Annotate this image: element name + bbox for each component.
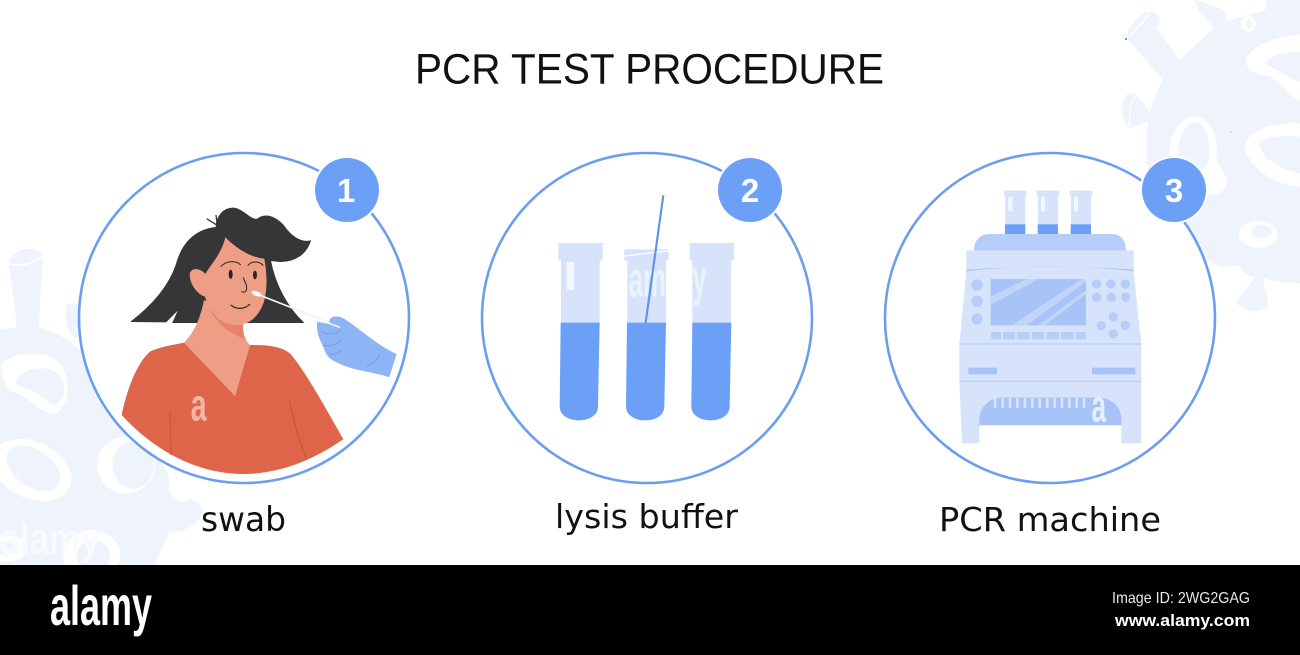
footer image id: Image ID: 2WG2GAG: [1112, 590, 1250, 607]
watermark letter: a: [191, 380, 207, 431]
circle outline 3: [885, 153, 1215, 483]
illustration: woman being swabbed: [122, 208, 397, 474]
number badge 1: [313, 156, 381, 224]
neck shadow: [209, 309, 245, 339]
tube left: [558, 243, 603, 420]
panel: step 3 PCR machine: [885, 153, 1215, 539]
title: PCR TEST PROCEDURE: [415, 46, 884, 94]
footer logo: alamy: [50, 574, 152, 637]
machine lid: [974, 234, 1126, 251]
face: [190, 237, 267, 325]
tube right: [690, 243, 734, 420]
panel: step 2 lysis buffer: [482, 153, 812, 536]
glove: [317, 317, 397, 377]
faint watermark on virus: alamy: [0, 515, 100, 563]
number badge 3: [1140, 156, 1208, 224]
hair: [131, 208, 311, 323]
body seams and vents: [959, 344, 1141, 381]
number badge 3: 3: [1165, 172, 1183, 209]
circle outline 1: [79, 153, 409, 483]
shirt creases: [170, 401, 307, 460]
panel: step 1 swab: [79, 153, 409, 540]
shirt: [122, 343, 343, 474]
lower opening: [979, 398, 1121, 425]
watermark letter: a: [1091, 380, 1107, 431]
lid seam: [966, 267, 1134, 271]
tube middle: [624, 195, 669, 420]
circle outline 2: [482, 153, 812, 483]
number badge 2: [716, 156, 784, 224]
hair strands: [207, 215, 217, 225]
eyes and brows: [221, 262, 263, 308]
tube middle: am: [629, 252, 666, 308]
illustration: three test tubes: [558, 195, 734, 420]
neck and chest: [184, 300, 250, 396]
background virus: left: [0, 249, 202, 580]
right buttons: [1092, 279, 1130, 339]
number badge 2: 2: [741, 172, 759, 209]
footer url: www.alamy.com: [1114, 611, 1250, 630]
left buttons: [971, 279, 983, 325]
swab: [253, 293, 340, 327]
number badge 1: 1: [337, 172, 355, 209]
footer bar: [0, 565, 1300, 655]
machine body: [959, 250, 1141, 443]
illustration: PCR machine: [959, 191, 1141, 443]
machine tubes: [1004, 191, 1092, 234]
opening ribs: [995, 398, 1084, 408]
screen: [991, 279, 1086, 325]
label: lysis buffer: lysis buffer: [555, 497, 738, 536]
soft keys: [991, 332, 1086, 339]
tube right: y: [692, 250, 706, 306]
background virus: right: [1122, 0, 1300, 313]
label: PCR machine: PCR machine: [939, 500, 1161, 539]
label: swab: swab: [201, 500, 286, 540]
